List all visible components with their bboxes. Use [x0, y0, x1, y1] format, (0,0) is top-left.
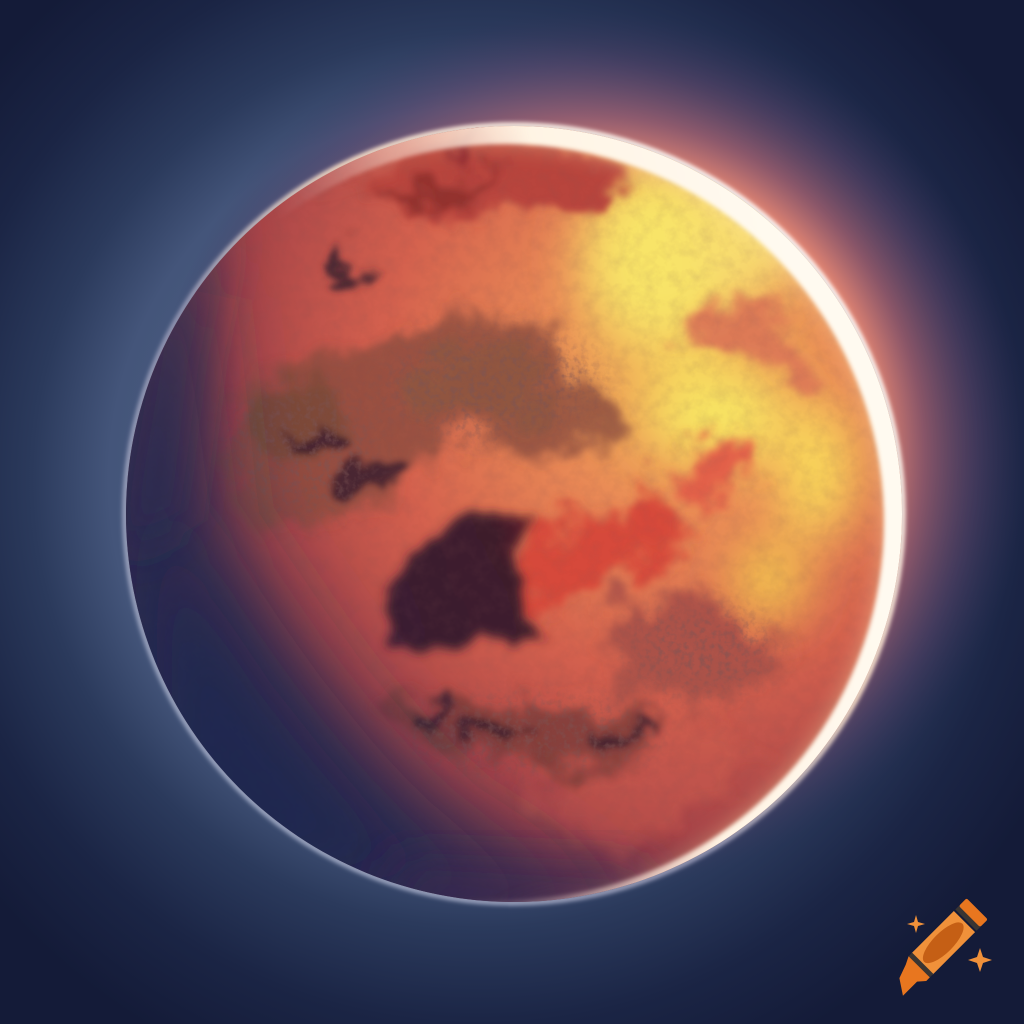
surface texture: [360, 180, 876, 728]
orange clouds over yellow: [514, 304, 809, 854]
bright limb crescent: [289, 126, 902, 902]
brown continents: [224, 309, 654, 764]
logo: crayon with sparkles: [886, 898, 992, 1000]
surface texture speckle on continents: [225, 335, 775, 767]
organic surface features: [224, 136, 809, 854]
sparkle large: [968, 948, 992, 972]
dusky left edge fade: [140, 234, 252, 500]
planet rim light: [125, 125, 903, 903]
dark central basin: [387, 510, 549, 654]
planet surface: [126, 126, 902, 902]
night side shadow: [110, 280, 620, 930]
planet sphere: [96, 112, 916, 932]
yellow sunlit region: [580, 160, 855, 622]
dark spots: [299, 234, 654, 744]
sparkle small: [907, 915, 925, 933]
soft inner limb glow: [394, 128, 886, 898]
north red storm: [339, 136, 629, 224]
bottom edge darkening: [380, 860, 660, 920]
crayon body: [886, 898, 988, 1000]
